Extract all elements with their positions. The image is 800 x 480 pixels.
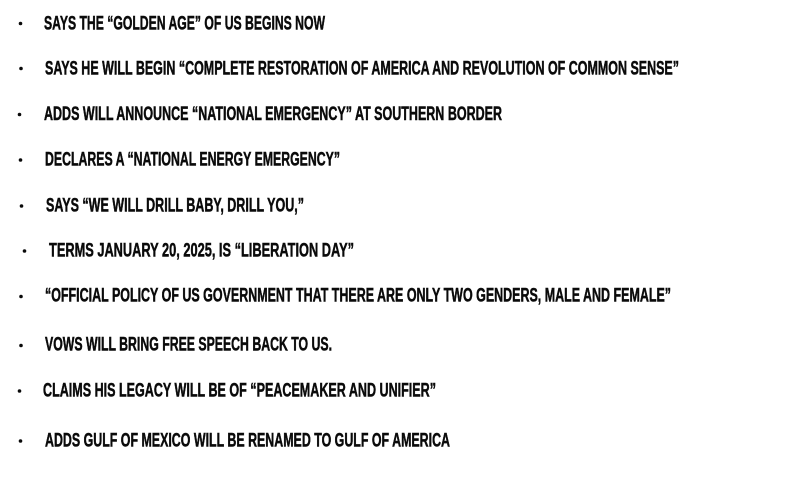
bullet item: drill: SAYS “WE WILL DRILL BABY, DRILL YOU,” (46, 196, 304, 216)
bullet item: national emergency at border (18, 104, 502, 125)
bullet item: liberation day: TERMS JANUARY 20, 2025, IS “LIBERATION DAY” (49, 240, 354, 262)
bullet item: peacemaker (18, 380, 436, 402)
bullet item: free speech (19, 334, 332, 356)
bullet item: golden age (19, 14, 325, 34)
bullet item: drill (20, 196, 304, 216)
bullet item: national emergency at border: ADDS WILL ANNOUNCE “NATIONAL EMERGENCY” AT SOUTHERN BORDER (44, 104, 502, 125)
bullet item: gulf of america: ADDS GULF OF MEXICO WILL BE RENAMED TO GULF OF AMERICA (45, 430, 450, 452)
bullet item: golden age: SAYS THE “GOLDEN AGE” OF US BEGINS NOW (44, 14, 325, 34)
bullet item: liberation day (23, 240, 354, 262)
bullet item: free speech: VOWS WILL BRING FREE SPEECH BACK TO US. (45, 334, 332, 356)
bullet item: gulf of america (19, 430, 450, 452)
bullet item: national energy emergency (19, 150, 340, 170)
bullet item: national energy emergency: DECLARES A “NATIONAL ENERGY EMERGENCY” (45, 150, 340, 170)
bullet item: peacemaker: CLAIMS HIS LEGACY WILL BE OF “PEACEMAKER AND UNIFIER” (43, 380, 436, 402)
